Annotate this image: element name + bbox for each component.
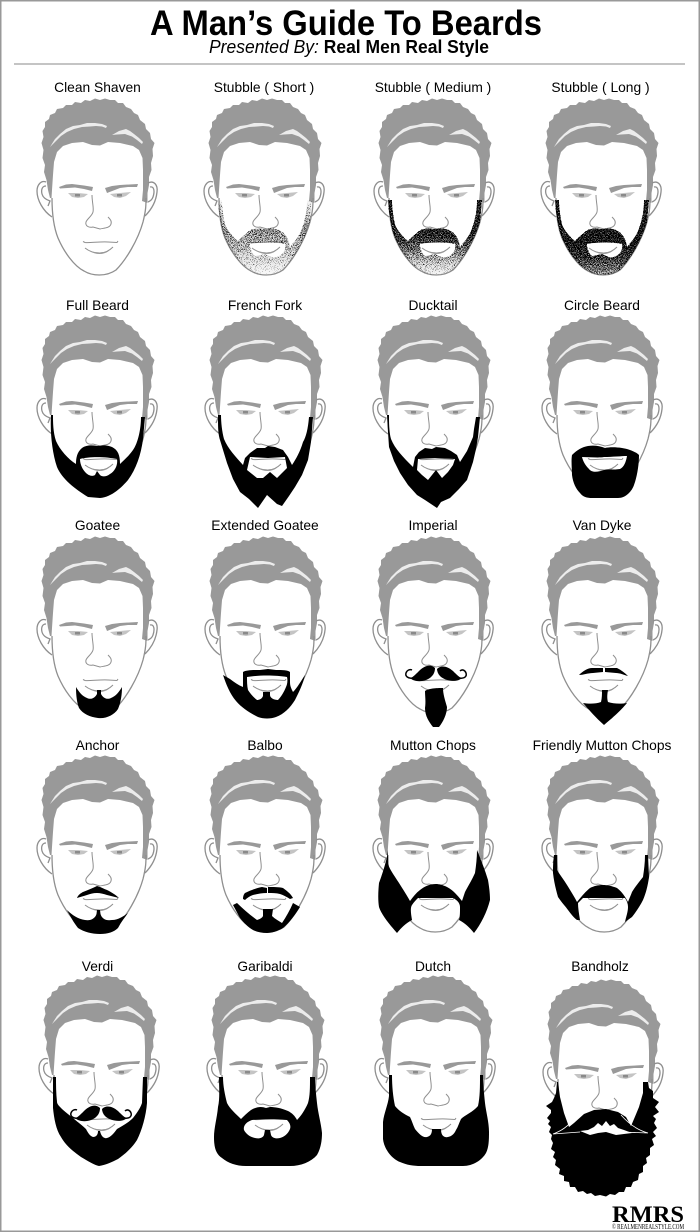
beard: bandholz: [546, 1082, 659, 1196]
panel: Full Beard: Full Beard: [66, 298, 129, 313]
panel: Garibaldi: Garibaldi: [237, 959, 293, 974]
panel: Clean Shaven: [37, 80, 157, 275]
panel: Dutch: Dutch: [415, 959, 451, 974]
panel: Clean Shaven: Clean Shaven: [54, 80, 141, 95]
panel: Imperial: Imperial: [408, 518, 458, 533]
panel: Bandholz: Bandholz: [571, 959, 629, 974]
panel: Verdi: [39, 959, 159, 1166]
panel: Stubble (Short): [204, 80, 324, 275]
panel: Van Dyke: Van Dyke: [573, 518, 632, 533]
beard: van dyke: [579, 668, 628, 725]
beard: imperial moustache and goatee: [406, 666, 466, 727]
panel: Goatee: Goatee: [75, 518, 120, 533]
panel: Dutch: [375, 959, 495, 1166]
panel: Stubble (Medium): [374, 80, 494, 275]
panel: Bandholz: [543, 959, 663, 1196]
logo: RMRS: RMRS: [612, 1202, 684, 1227]
panel: Full Beard: [37, 298, 157, 498]
panel: Verdi: Verdi: [82, 959, 113, 974]
beard: full beard: [51, 415, 145, 498]
beard: french fork: [218, 415, 313, 508]
beard: medium stubble: [388, 200, 482, 275]
title: A Man’s Guide To Beards: [150, 4, 542, 43]
beard: circle beard: [572, 446, 639, 498]
panel: Mutton Chops: [373, 738, 493, 933]
panel: Friendly Mutton Chops: Friendly Mutton Chops: [533, 738, 671, 753]
beard: dutch: [383, 1075, 489, 1166]
panel: Balbo: Balbo: [247, 738, 283, 753]
beard: ducktail: [387, 415, 480, 508]
beard: goatee: [76, 687, 122, 718]
panel: Extended Goatee: [205, 518, 325, 718]
panel: Balbo: [205, 738, 325, 933]
beard: garibaldi: [214, 1077, 322, 1166]
panel: French Fork: French Fork: [228, 298, 302, 313]
panel: Stubble (Long): Stubble ( Long ): [551, 80, 650, 95]
panel: Garibaldi: [207, 959, 327, 1166]
beard: long stubble: [555, 200, 649, 275]
panel: Anchor: [37, 738, 157, 934]
panel: Stubble (Medium): Stubble ( Medium ): [375, 80, 491, 95]
beard: mutton chops: [378, 850, 490, 933]
beard: friendly mutton chops: [553, 855, 649, 922]
panel: French Fork: [205, 298, 325, 508]
beard: balbo: [233, 887, 300, 933]
panel: Stubble (Short): Stubble ( Short ): [214, 80, 314, 95]
panel: Circle Beard: Circle Beard: [564, 298, 640, 313]
panel: Ducktail: [373, 298, 493, 508]
beard: extended goatee: [223, 669, 305, 718]
panel: Van Dyke: [542, 518, 662, 725]
subtitle: Presented By: Real Men Real Style: [209, 36, 489, 57]
panel: Circle Beard: [542, 298, 662, 498]
panel: Friendly Mutton Chops: [533, 738, 671, 932]
beard: anchor: [67, 886, 128, 934]
beard: verdi: [53, 1077, 147, 1166]
panel: Goatee: [37, 518, 157, 718]
panel: Mutton Chops: Mutton Chops: [390, 738, 476, 753]
panel: Imperial: [373, 518, 493, 727]
panel: Anchor: Anchor: [76, 738, 120, 753]
panel: Extended Goatee: Extended Goatee: [211, 518, 319, 533]
panel: Stubble (Long): [541, 80, 661, 275]
panel: Ducktail: Ducktail: [408, 298, 458, 313]
beard: short stubble: [218, 200, 312, 275]
